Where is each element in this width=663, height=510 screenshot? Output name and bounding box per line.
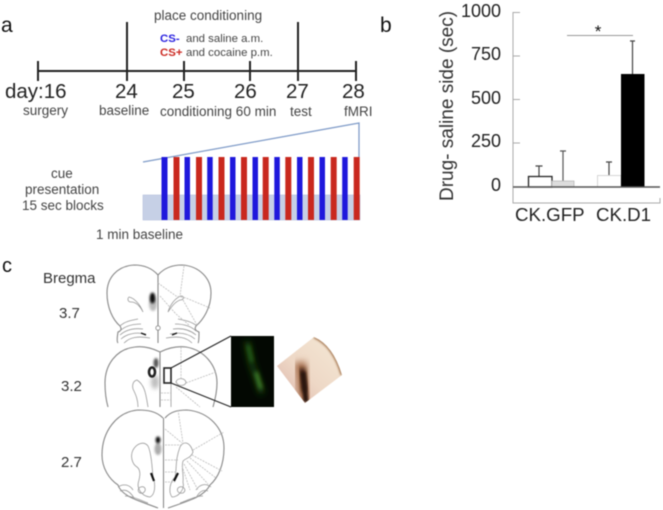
significance bracket	[567, 34, 633, 36]
Bregma values: 2.7	[61, 454, 82, 471]
day labels: baseline	[99, 103, 149, 118]
Bregma values: 3.2	[61, 378, 82, 395]
brain section 2.7	[102, 410, 224, 508]
red cue bars	[174, 157, 360, 220]
group labels: CK.D1	[596, 204, 651, 225]
day labels: conditioning 60 min	[160, 104, 276, 119]
y tick labels	[461, 1, 501, 195]
timeline axis	[38, 22, 356, 81]
panel: bar chart	[437, 1, 660, 225]
day numbers: 25	[172, 80, 195, 103]
image: stained tissue	[276, 336, 342, 404]
day labels	[23, 103, 372, 119]
panel label c: c	[2, 255, 12, 277]
day labels: test	[290, 104, 312, 119]
Bregma values: 3.7	[59, 305, 80, 322]
baseline text: 1 min baseline	[96, 227, 183, 242]
Bregma values	[59, 305, 82, 471]
Bregma heading: Bregma	[43, 270, 96, 287]
bar CK.GFP white	[528, 166, 552, 187]
group labels: CK.GFP	[515, 204, 585, 225]
cue text	[22, 166, 104, 213]
day numbers: 28	[342, 80, 365, 103]
y tick labels: 750	[471, 44, 501, 64]
CS+ line: CS+	[160, 47, 183, 59]
day numbers: 26	[234, 80, 257, 103]
day numbers: day:16	[5, 80, 67, 103]
significance star: *	[595, 22, 602, 41]
baseline block	[143, 195, 360, 220]
y tick labels: 500	[471, 88, 501, 108]
day labels: surgery	[23, 103, 68, 118]
bar CK.GFP gray	[552, 151, 574, 187]
panel label b: b	[380, 14, 392, 37]
day labels: fMRI	[344, 104, 372, 119]
day numbers: 24	[115, 80, 138, 103]
bar CK.D1 white	[598, 162, 621, 187]
brain section 3.7	[107, 265, 211, 343]
bar CK.D1 black	[621, 41, 644, 187]
zero line	[513, 186, 660, 188]
panel: brain sections	[43, 265, 350, 508]
expansion lines	[143, 123, 359, 162]
image: green fluorescence	[231, 336, 274, 407]
y tick labels: 0	[491, 175, 501, 195]
y tick labels: 250	[471, 131, 501, 151]
panel: timeline	[5, 8, 372, 119]
CS+ line: and cocaine p.m.	[186, 47, 273, 59]
zoom box and callout lines	[164, 336, 231, 407]
day numbers: 27	[286, 80, 309, 103]
brain section 3.2	[105, 347, 217, 407]
panel: cue presentation	[22, 123, 360, 242]
CS- line: CS-	[160, 33, 180, 45]
heading: place conditioning: place conditioning	[154, 8, 262, 23]
y tick labels: 1000	[461, 1, 501, 21]
blue cue bars	[162, 157, 348, 220]
cue text: presentation	[25, 182, 99, 197]
y axis title: Drug- saline side (sec)	[437, 11, 458, 201]
group labels	[515, 204, 651, 225]
cue text: cue	[51, 166, 73, 181]
axes	[513, 12, 660, 203]
panel label a: a	[1, 14, 13, 37]
CS- line: and saline a.m.	[186, 33, 263, 45]
cue text: 15 sec blocks	[22, 198, 104, 213]
day numbers	[5, 80, 365, 103]
